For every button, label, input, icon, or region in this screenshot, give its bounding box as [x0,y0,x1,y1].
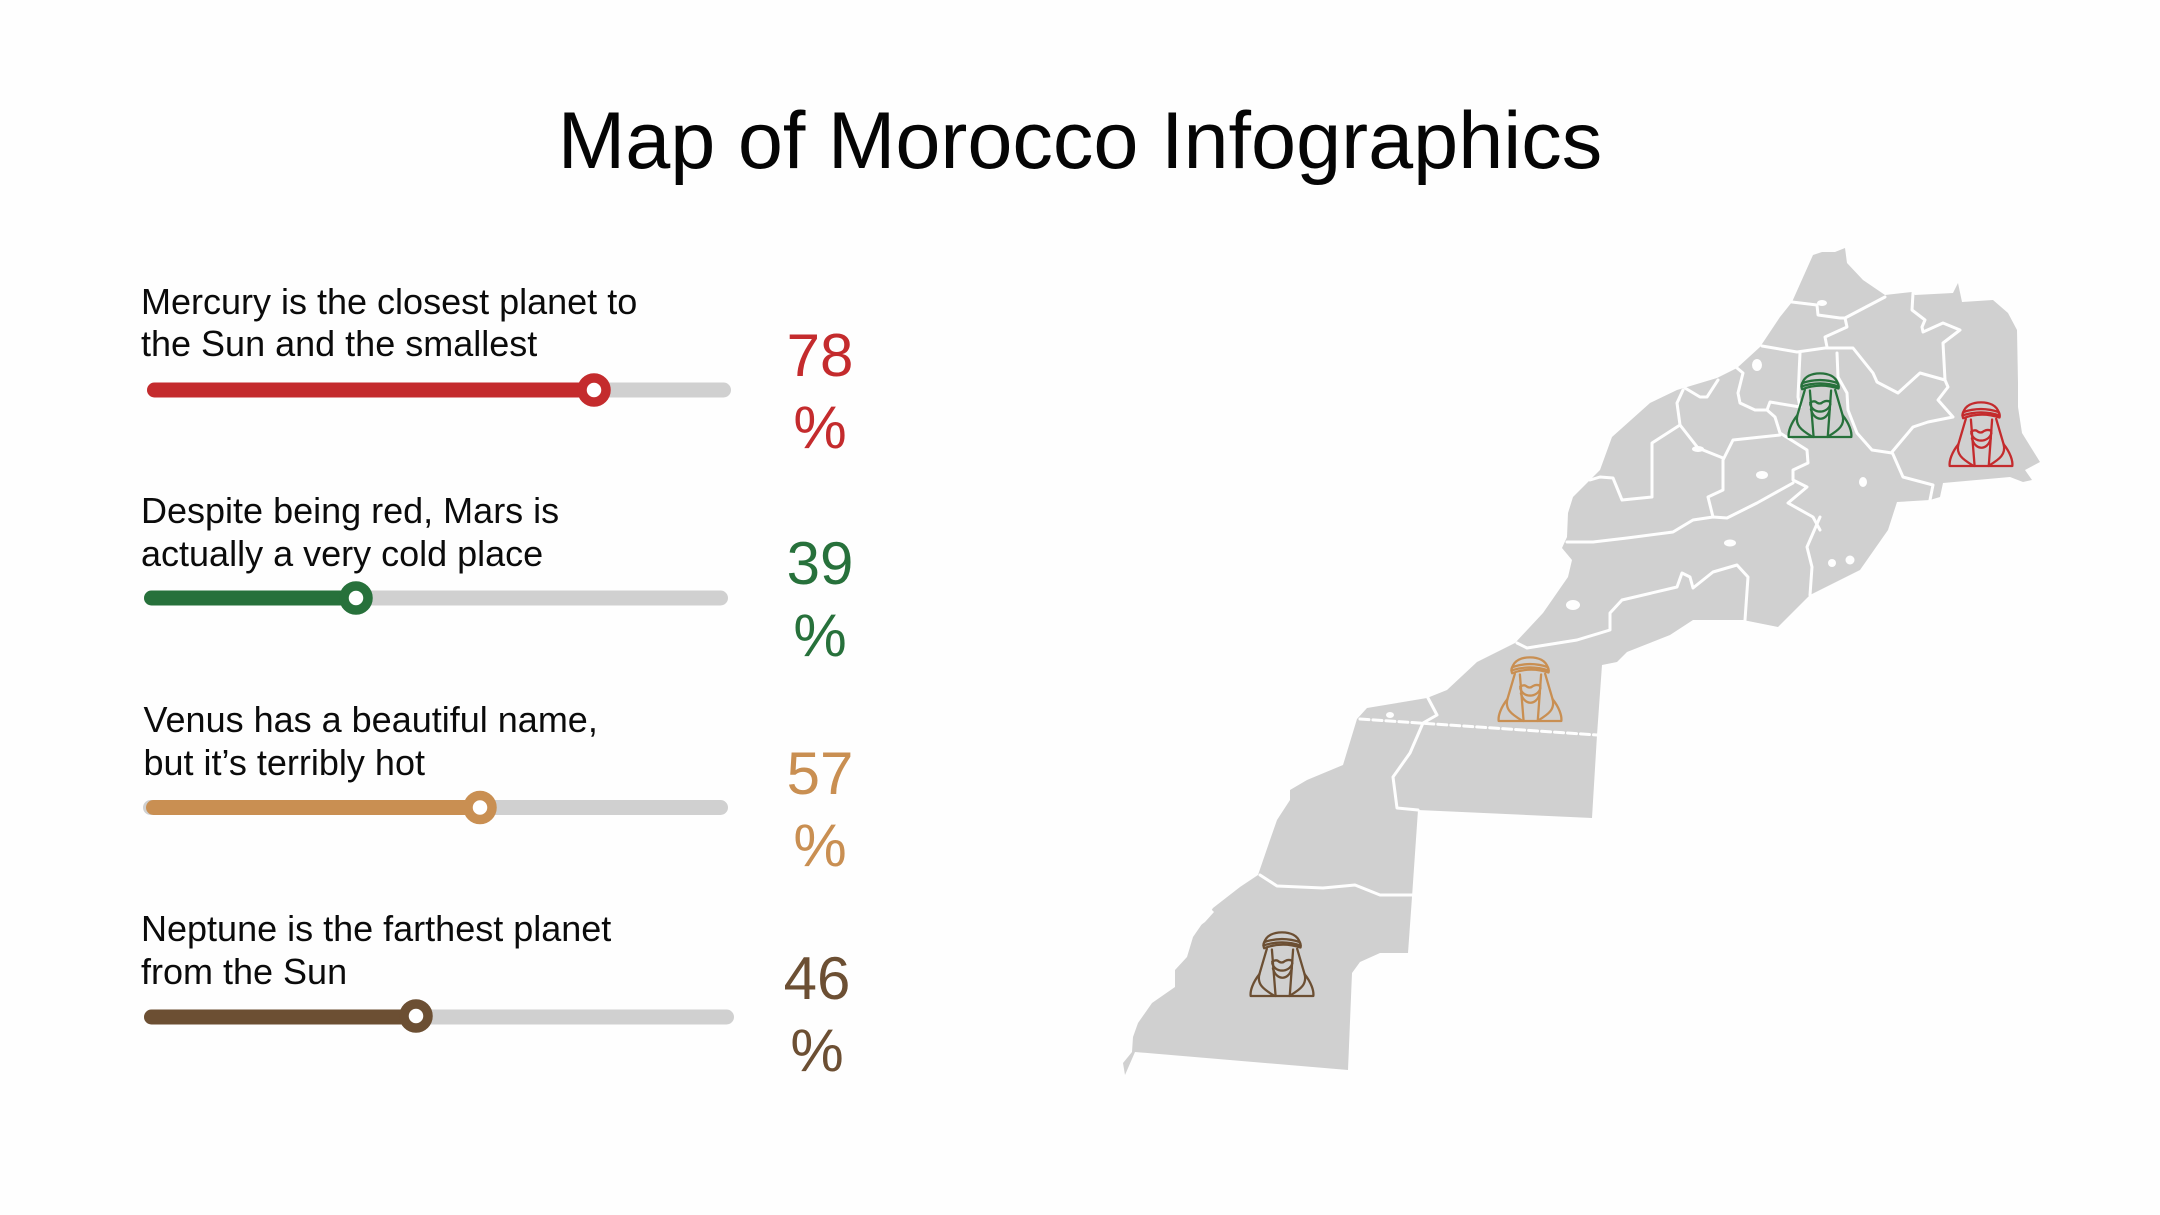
value: 46%: % [790,1017,844,1084]
value: 46% [784,945,850,1084]
value: 57% [787,740,853,879]
text: Mercury description: Mercury is the closest planet to [141,281,637,322]
value: 39%: % [793,602,847,669]
value: 39%: 39 [787,530,853,597]
value: 57%: % [793,812,847,879]
progress bar: 57% [143,796,728,820]
panel: Mars 39% [141,490,853,669]
value: 78%: 78 [787,322,853,389]
text: Neptune description: Neptune is the farthest planet [141,908,611,949]
value: 78%: % [793,394,847,461]
value: 46%: 46 [784,945,850,1012]
value: 39% [787,530,853,669]
text: Mercury description: the Sun and the smallest [141,323,537,364]
text: Venus description [144,699,598,783]
title: Map of Morocco Infographics [558,96,1602,186]
progress bar: 78% [147,378,731,402]
map of Morocco [1123,248,2040,1075]
value: 78% [787,322,853,461]
text: Neptune description: from the Sun [141,951,347,992]
text: Mercury description [141,281,637,364]
icon: man with headdress, green [1789,373,1851,437]
text: Mars description [141,490,559,574]
icon: man with headdress, red [1950,402,2012,466]
value: 57%: 57 [787,740,853,807]
icon: man with headdress, brown [1251,932,1313,996]
text: Mars description: actually a very cold place [141,533,543,574]
text: Neptune description [141,908,611,992]
text: Mars description: Despite being red, Mars is [141,490,559,531]
progress bar: 39% [144,586,728,610]
panel: Venus 57% [143,699,853,879]
icon: man with headdress, tan [1499,657,1561,721]
panel: Mercury 78% [141,281,853,461]
text: Venus description: Venus has a beautiful name, [144,699,598,740]
progress bar: 46% [144,1004,734,1028]
panel: Neptune 46% [141,908,850,1084]
text: Venus description: but it’s terribly hot [144,742,425,783]
